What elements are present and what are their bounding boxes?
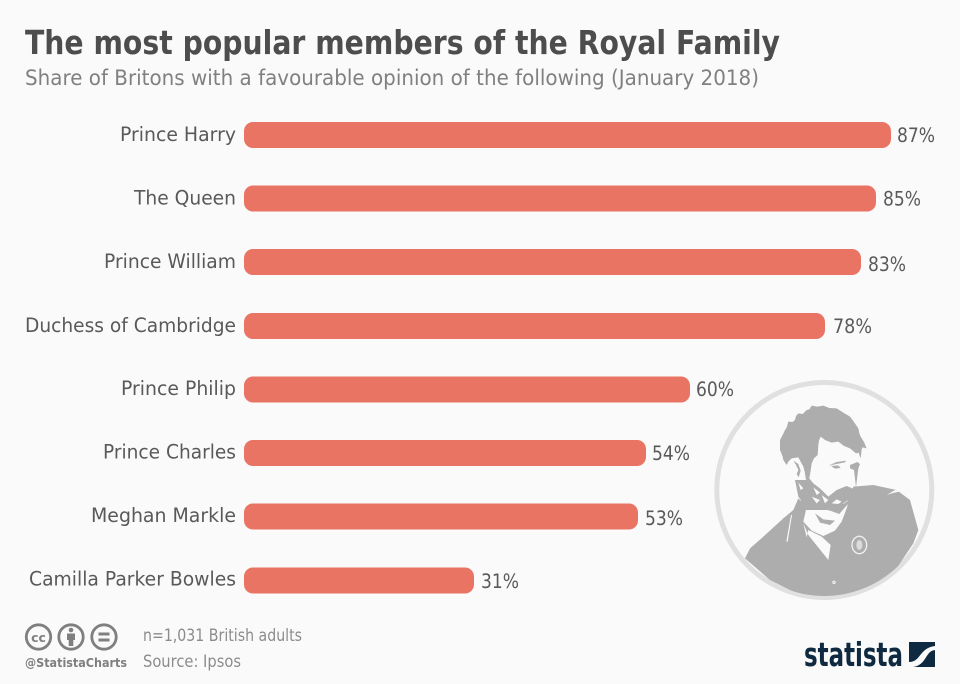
icon: statista mark [909,642,935,667]
row: Prince Harry [120,122,935,148]
row: Prince Philip [121,376,734,402]
row: Meghan Markle: Meghan Markle [91,504,236,527]
logo: statista: statista [804,635,903,674]
row: Prince Philip: 60% [696,378,734,401]
subtitle: Share of Britons with a favourable opinion of the following (January 2018) [25,66,759,91]
title: The most popular members of the Royal Family [25,23,780,62]
row: Prince Charles: Prince Charles [103,440,236,464]
row: The Queen: The Queen [133,186,236,210]
bar chart [25,122,935,594]
source: Source: Ipsos [143,652,241,671]
row: Camilla Parker Bowles: 31% [481,570,519,593]
row: Prince William: Prince William [104,250,236,273]
icon: cc: cc [31,630,46,645]
icon: attribution [59,625,83,649]
row: Prince Harry: 87% [897,124,935,147]
row: Prince Harry: Prince Harry [120,123,236,146]
icon: creative commons licence [26,625,116,649]
row: The Queen [133,186,921,212]
row: Meghan Markle [91,504,683,530]
row: Duchess of Cambridge [25,313,872,339]
row: Prince Philip: Prince Philip [121,377,236,400]
row: Prince William [104,249,906,276]
row: Camilla Parker Bowles [29,568,519,594]
row: Duchess of Cambridge: 78% [833,315,872,338]
row: Prince Charles: 54% [652,442,690,465]
credit handle: @StatistaCharts [25,655,127,670]
sample note: n=1,031 British adults [143,626,302,645]
icon: no derivatives [92,625,116,649]
row: Prince William: 83% [868,253,906,276]
row: Camilla Parker Bowles: Camilla Parker Bowles [29,568,236,590]
row: Duchess of Cambridge: Duchess of Cambridge [25,314,236,337]
row: Meghan Markle: 53% [645,507,683,530]
row: Prince Charles [103,440,690,466]
row: The Queen: 85% [883,188,921,210]
portrait: Prince Harry in a circle [717,382,932,600]
